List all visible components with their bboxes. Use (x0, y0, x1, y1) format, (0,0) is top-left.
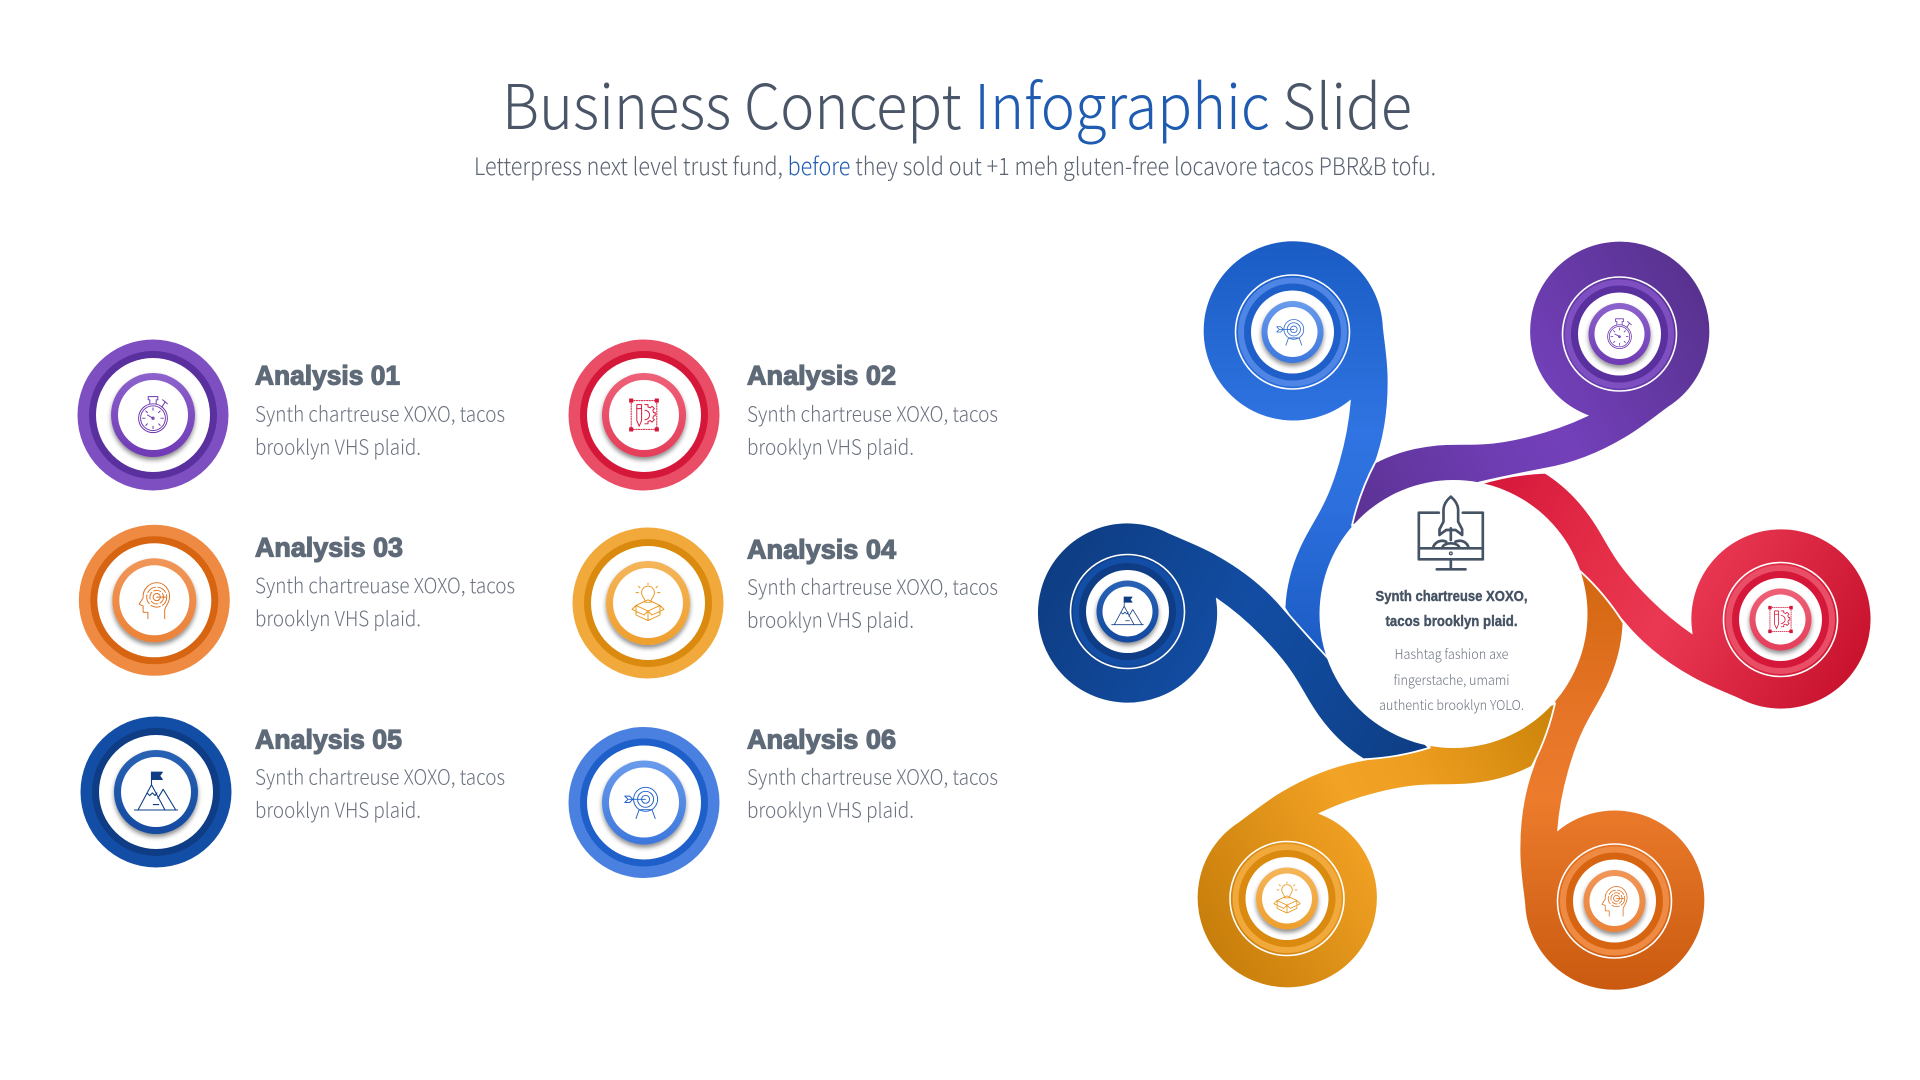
badge: orange brain (79, 525, 230, 676)
description: Synth chartreuse XOXO, tacos (747, 760, 998, 790)
badge: purple stopwatch (78, 340, 228, 490)
subtitle: Letterpress next level trust fund, before they sold out +1 meh gluten-free locavore tacos PBR&B tofu. (474, 147, 1436, 182)
description: Synth chartreuase XOXO, tacos (255, 569, 515, 599)
description: Synth chartreuse XOXO, tacos (747, 570, 998, 600)
node: red pen tool (1724, 562, 1838, 676)
center description: Hashtag fashion axe (1394, 643, 1508, 663)
description: brooklyn VHS plaid. (255, 602, 421, 632)
icon: rocket monitor (1419, 497, 1483, 569)
badge: blue target (568, 727, 720, 878)
description: brooklyn VHS plaid. (747, 430, 914, 460)
center circle (1320, 480, 1588, 748)
center description: fingerstache, umami (1394, 669, 1510, 689)
heading: Analysis 04 (747, 534, 896, 564)
description: Synth chartreuse XOXO, tacos (255, 398, 505, 428)
center heading: tacos brooklyn plaid. (1386, 614, 1518, 630)
panel: analysis 04 (572, 528, 998, 678)
arm: blue (1203, 240, 1389, 660)
description: brooklyn VHS plaid. (255, 430, 421, 460)
description: brooklyn VHS plaid. (747, 604, 914, 634)
description: Synth chartreuse XOXO, tacos (747, 398, 998, 428)
title: Business Concept Infographic Slide (502, 57, 1412, 147)
node: dark blue mountain (1070, 554, 1184, 668)
arm: dark blue (1004, 485, 1460, 856)
description: Synth chartreuse XOXO, tacos (255, 760, 505, 790)
heading: Analysis 06 (747, 724, 896, 754)
center heading: Synth chartreuse XOXO, (1376, 589, 1528, 605)
spiral diagram (1004, 208, 1905, 1021)
panel: analysis 01 (78, 340, 505, 490)
heading: Analysis 01 (255, 360, 400, 390)
description: brooklyn VHS plaid. (747, 794, 914, 824)
arm: yellow (1161, 651, 1617, 1021)
node: purple stopwatch (1562, 277, 1676, 391)
node: yellow box (1230, 842, 1344, 956)
panel: analysis 06 (568, 724, 998, 878)
arm: orange (1519, 571, 1705, 991)
arm: purple (1290, 208, 1746, 578)
node: blue target (1236, 275, 1350, 389)
panel: analysis 05 (80, 716, 505, 868)
arm: red (1449, 376, 1905, 747)
panel: analysis 03 (79, 525, 515, 676)
node: orange brain (1558, 844, 1672, 958)
description: brooklyn VHS plaid. (255, 794, 421, 824)
center description: authentic brooklyn YOLO. (1379, 694, 1524, 714)
badge: yellow box (572, 528, 724, 678)
heading: Analysis 05 (255, 724, 402, 754)
badge: dark blue mountain (80, 716, 232, 868)
badge: red pen tool (568, 340, 720, 490)
heading: Analysis 02 (747, 360, 896, 390)
panel: analysis 02 (568, 340, 998, 490)
heading: Analysis 03 (255, 532, 403, 562)
